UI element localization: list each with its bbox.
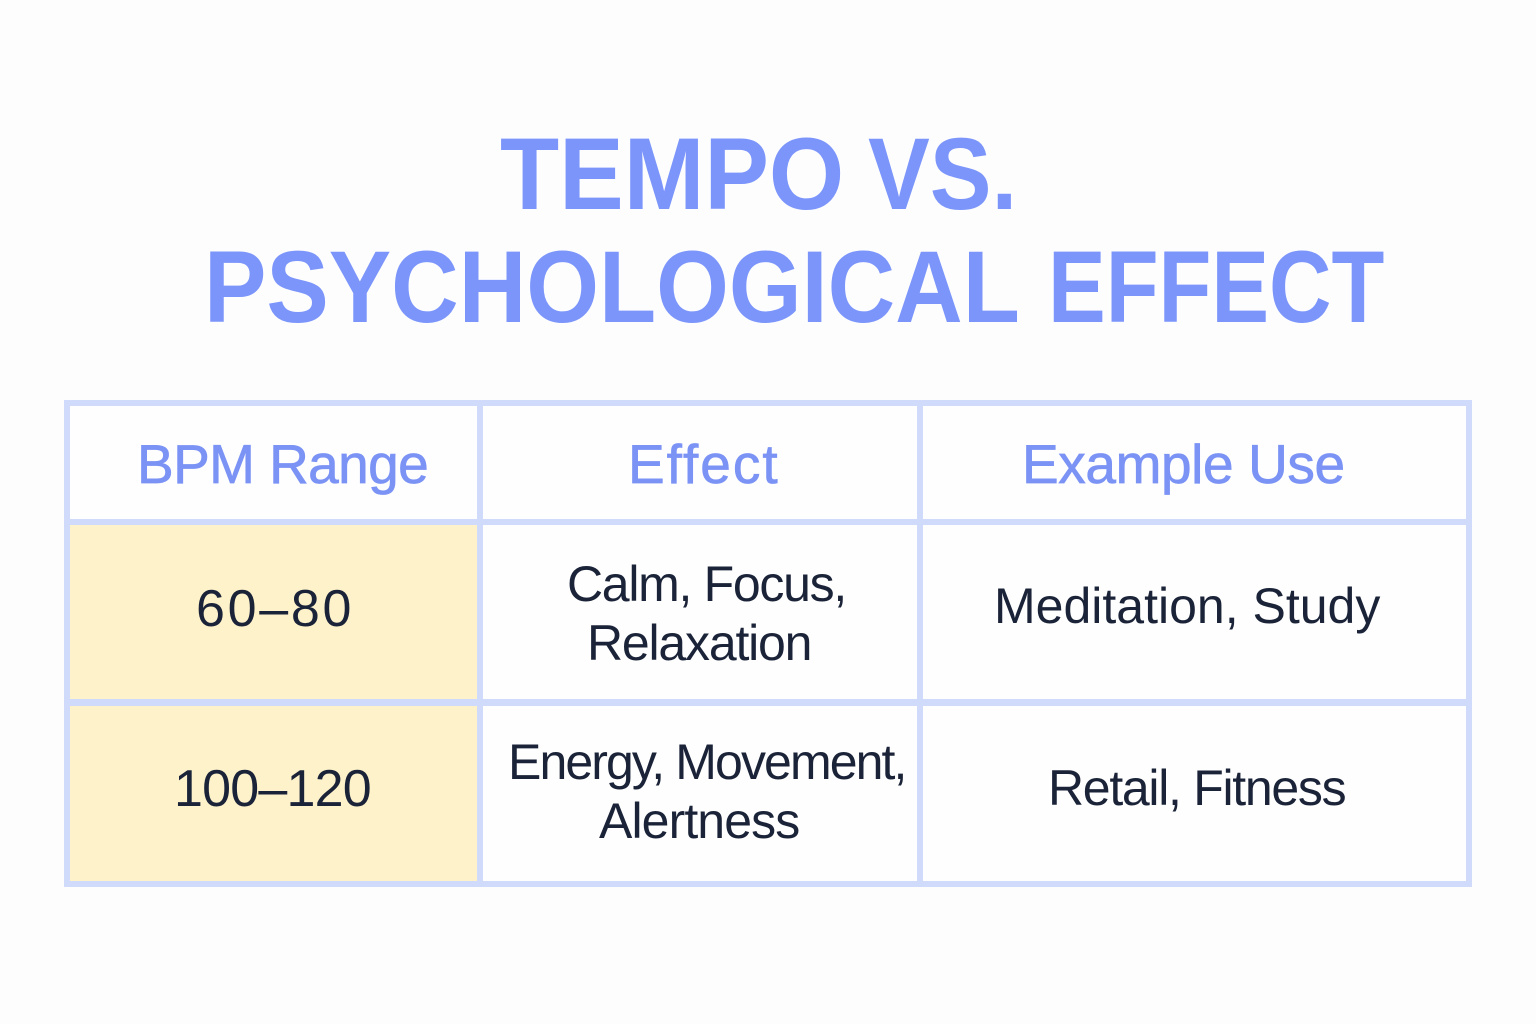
- highlighted cell: 60-80: [70, 525, 477, 699]
- title: TEMPO: [500, 117, 844, 231]
- value: calm focus relaxation: [567, 556, 846, 671]
- value: calm focus relaxation: Relaxation: [587, 615, 811, 671]
- highlighted cell: 100-120: [70, 706, 477, 881]
- value: energy movement alertness: [508, 734, 906, 849]
- title: EFFECT: [1048, 230, 1384, 344]
- title: PSYCHOLOGICAL: [204, 230, 1020, 344]
- value: retail fitness: Retail, Fitness: [1048, 760, 1345, 816]
- value: energy movement alertness: Energy, Movement,: [508, 734, 906, 790]
- value: 100-120: 100–120: [174, 760, 371, 818]
- title: [204, 117, 1384, 344]
- title: VS.: [868, 117, 1017, 231]
- header: Example Use: Example Use: [1022, 433, 1345, 495]
- value: calm focus relaxation: Calm, Focus,: [567, 556, 846, 612]
- table: [64, 400, 1472, 887]
- header: BPM Range: BPM Range: [137, 433, 428, 495]
- header: Effect: Effect: [628, 433, 780, 495]
- value: energy movement alertness: Alertness: [599, 793, 799, 849]
- value: 60-80: 60–80: [196, 580, 354, 638]
- value: meditation study: Meditation, Study: [994, 578, 1380, 634]
